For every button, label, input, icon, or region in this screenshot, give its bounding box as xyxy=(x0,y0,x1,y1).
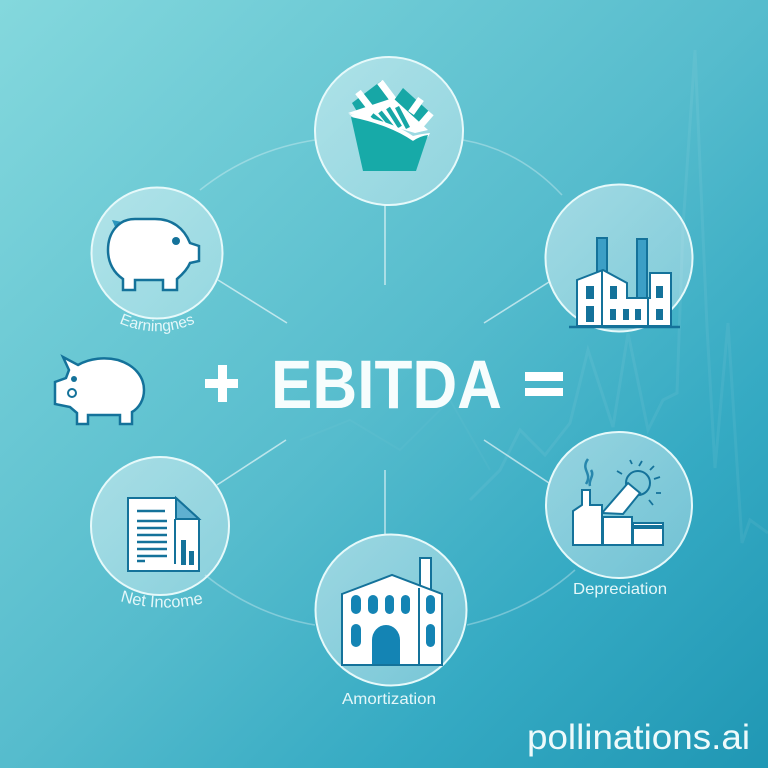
icon: factory xyxy=(569,238,680,327)
label: Net Income: Net Income xyxy=(121,590,202,608)
icon: piggy bank facing right xyxy=(108,219,199,290)
icon: basket of banknotes xyxy=(348,81,433,171)
node: net income xyxy=(90,456,230,608)
formula heading: + EBITDA = xyxy=(205,346,563,423)
equals sign xyxy=(525,372,563,396)
connector lines xyxy=(200,140,575,625)
icon: report document xyxy=(128,498,199,571)
label: Earningnes: Earningnes xyxy=(120,314,194,334)
icon: building with arch xyxy=(342,558,442,665)
node: earnings piggy bank xyxy=(90,186,224,334)
plus sign xyxy=(205,365,238,402)
node: cash basket xyxy=(315,57,463,205)
label: Depreciation: Depreciation xyxy=(573,581,667,598)
label: Amortization: Amortization xyxy=(342,691,436,708)
node: factory xyxy=(546,184,692,332)
watermark: pollinations.ai: pollinations.ai xyxy=(527,718,750,757)
icon: industrial plant with lightbulb xyxy=(573,459,663,545)
node: amortization xyxy=(316,534,466,708)
node: depreciation xyxy=(546,432,692,598)
title: EBITDA: EBITDA xyxy=(271,346,502,423)
icon: standalone piggy bank facing left xyxy=(55,357,144,424)
